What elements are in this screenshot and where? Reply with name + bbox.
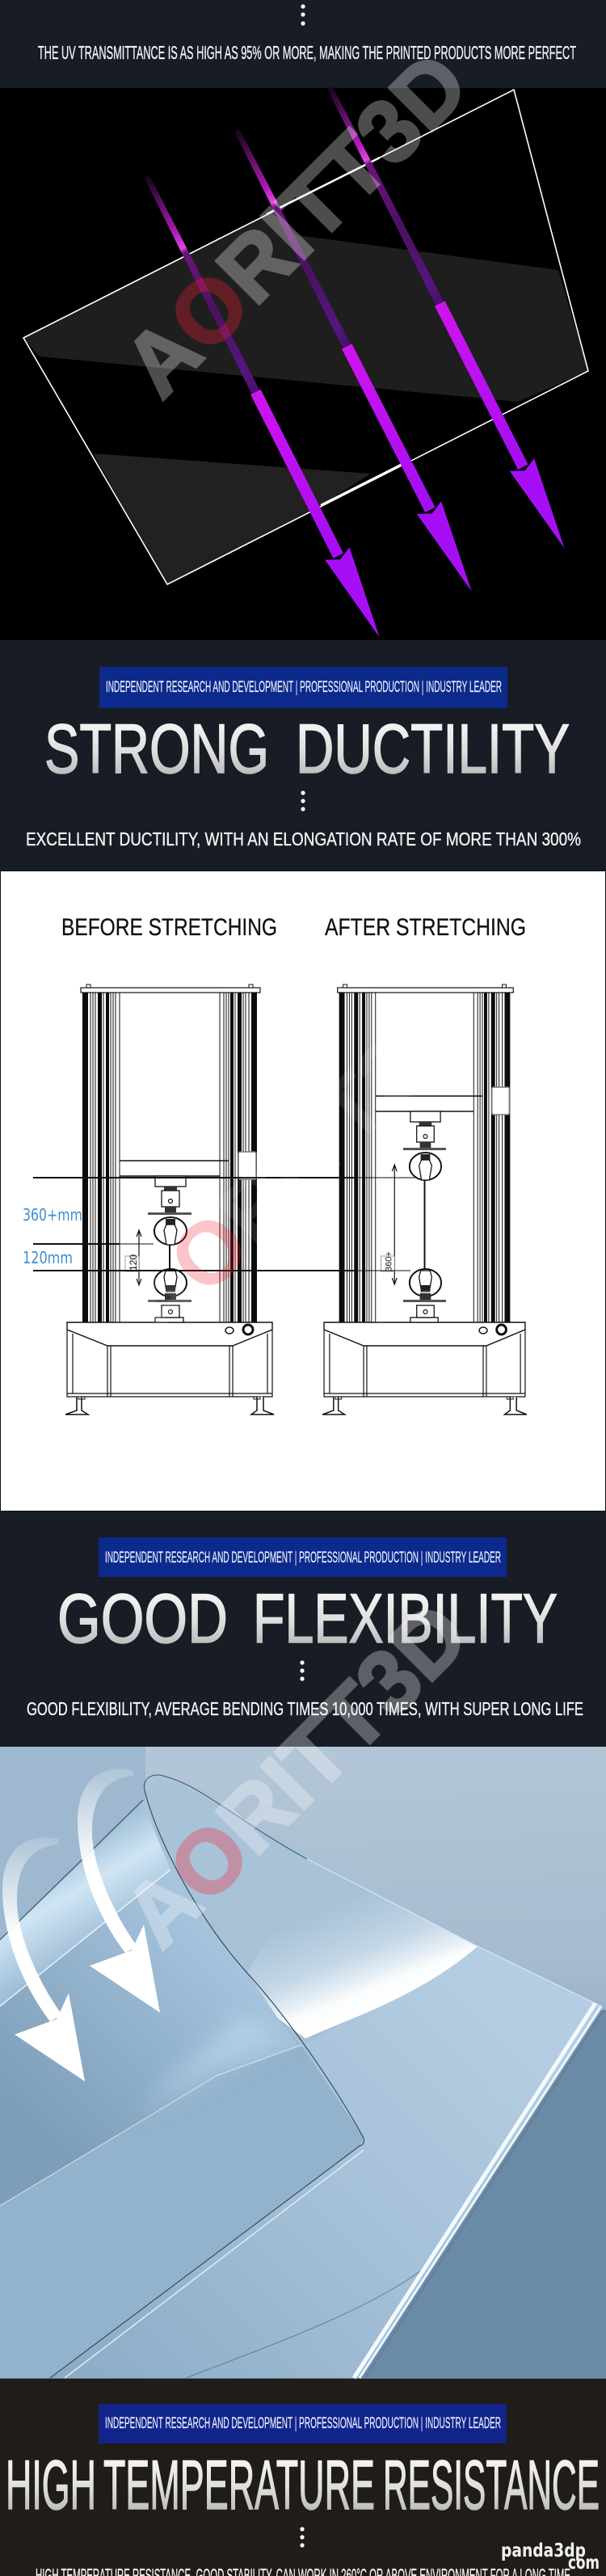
measurement lines: [33, 1178, 416, 1271]
banner: high temperature slogan: [99, 2404, 507, 2443]
icon: vertical dots: [301, 4, 305, 26]
label: after stretching: AFTER STRETCHING: [325, 914, 526, 941]
heading: strong ductility: [44, 710, 570, 788]
icon: vertical dots: [300, 1660, 305, 1681]
watermark: middle: AORITT3D: [105, 976, 486, 1357]
label: before stretching: BEFORE STRETCHING: [61, 914, 277, 941]
icon: vertical dots: [301, 791, 305, 812]
label: 360+mm: 360+mm: [23, 1205, 82, 1225]
machine: before stretching: 120: [128, 1254, 139, 1271]
watermark: lower: AORITT3D: [105, 1584, 486, 1966]
film: flat sheet: [0, 1946, 601, 2378]
arrow: curved white left: [2, 1837, 85, 2081]
highlight: tube reflection: [0, 1804, 170, 2006]
banner: strong ductility slogan: [99, 667, 507, 708]
film edges: [0, 1775, 604, 2378]
watermark: top: AORITT3D: [105, 34, 486, 415]
panel: UV transmission illustration: [0, 81, 606, 643]
section background: high temperature resistance: [0, 2379, 606, 2576]
arrow: curved white right: [78, 1769, 160, 2013]
icon: vertical dots: [300, 2527, 305, 2548]
highlight: curl glow: [247, 1861, 478, 2038]
section background: strong ductility: [0, 640, 606, 871]
panel: stretching diagram: [0, 871, 606, 1511]
heading: high temperature resistance: HIGH: [6, 2447, 96, 2524]
panel: bent film illustration: [0, 1747, 606, 2379]
heading: good flexibility: [57, 1580, 558, 1658]
arrow: UV ray left: [134, 169, 392, 643]
arrow: UV ray middle: [225, 124, 484, 597]
stamp: panda3dp.com: panda3dp: [501, 2540, 586, 2561]
header: section background: [0, 0, 606, 88]
arrow: UV ray right: [318, 81, 577, 554]
highlight: fold glow: [137, 2013, 287, 2111]
heading: good flexibility: GOOD: [57, 1580, 228, 1658]
film: back of bent sheet: [0, 1870, 364, 2378]
banner: good flexibility slogan: [99, 1537, 507, 1577]
machine: after stretching: 360+: [384, 1251, 393, 1271]
section background: good flexibility: [0, 1511, 606, 1747]
stamp: panda3dp.com: [501, 2540, 600, 2574]
film: curled sheet: [145, 1776, 478, 2047]
machine: before stretching: [65, 984, 274, 1414]
label: 120mm: 120mm: [23, 1248, 73, 1267]
machine: after stretching: [322, 984, 527, 1414]
heading: strong ductility: STRONG: [44, 710, 269, 788]
